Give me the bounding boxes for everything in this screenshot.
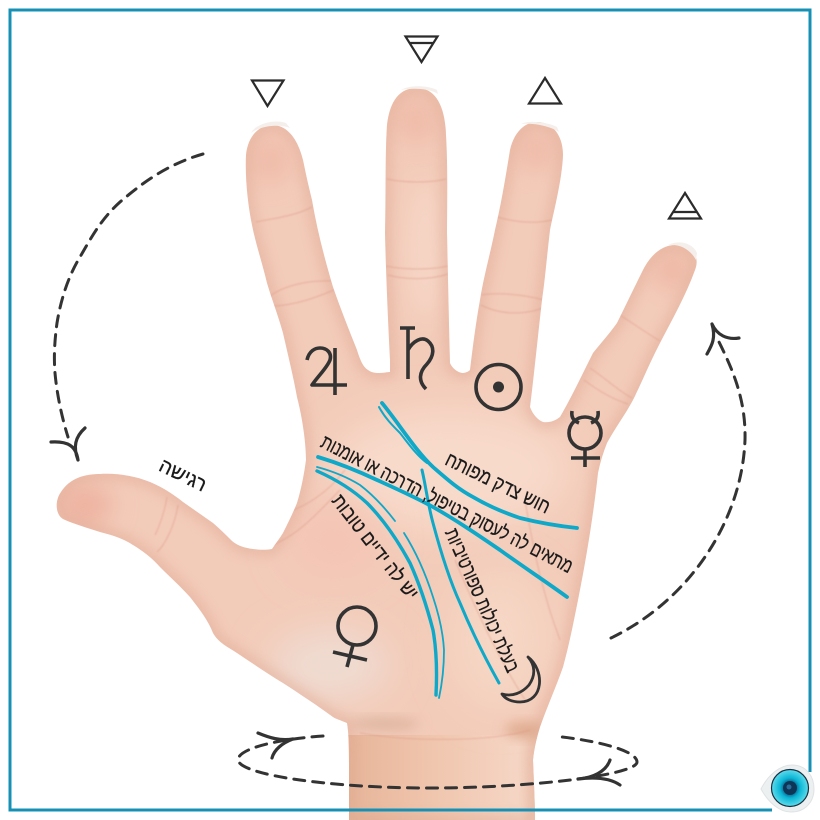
planet symbol: Sun: [476, 364, 521, 410]
planet symbol: Saturn: [400, 327, 433, 389]
life line: [317, 471, 437, 695]
palm lines: [317, 403, 577, 698]
arrow: left curved dashed: [51, 154, 203, 460]
label: athletic abilities: בעלת יכולות ספורטיביות: [440, 525, 523, 676]
label: sense of justice: חוש צדק מפותח: [442, 449, 554, 518]
arrow: right curved dashed: [611, 324, 745, 638]
planet symbol: Mercury: [569, 411, 601, 467]
head line: [318, 457, 567, 597]
element symbol: little finger triangle: [669, 193, 701, 218]
element symbol: ring finger triangle: [529, 78, 561, 104]
label: suited to therapy, teaching or art: מתאים לה לעסוק בטיפול, הדרכה או אומנות: [317, 431, 576, 578]
heart line companion: [379, 407, 427, 463]
life line companion lower: [404, 533, 444, 698]
skin creases: [155, 179, 660, 739]
planet symbol: Jupiter: [307, 348, 347, 395]
planet symbol: Moon: [502, 657, 540, 702]
arrow: wrist rotation ellipse: [238, 733, 637, 788]
label: good hands: יש לה ידיים טובות: [327, 490, 422, 604]
element symbol: middle finger triangle: [406, 36, 438, 62]
heart line: [382, 403, 577, 528]
hand photo: [40, 70, 720, 820]
logo: eye: [761, 765, 814, 812]
element symbol: index finger triangle: [252, 80, 284, 106]
label: sensitive: רגישה: [155, 455, 210, 496]
life line companion upper: [317, 467, 395, 521]
fingernail tips: [251, 86, 697, 260]
fate line: [422, 470, 499, 683]
planet symbol: Venus: [333, 607, 376, 667]
soft contour shading: [57, 88, 697, 820]
